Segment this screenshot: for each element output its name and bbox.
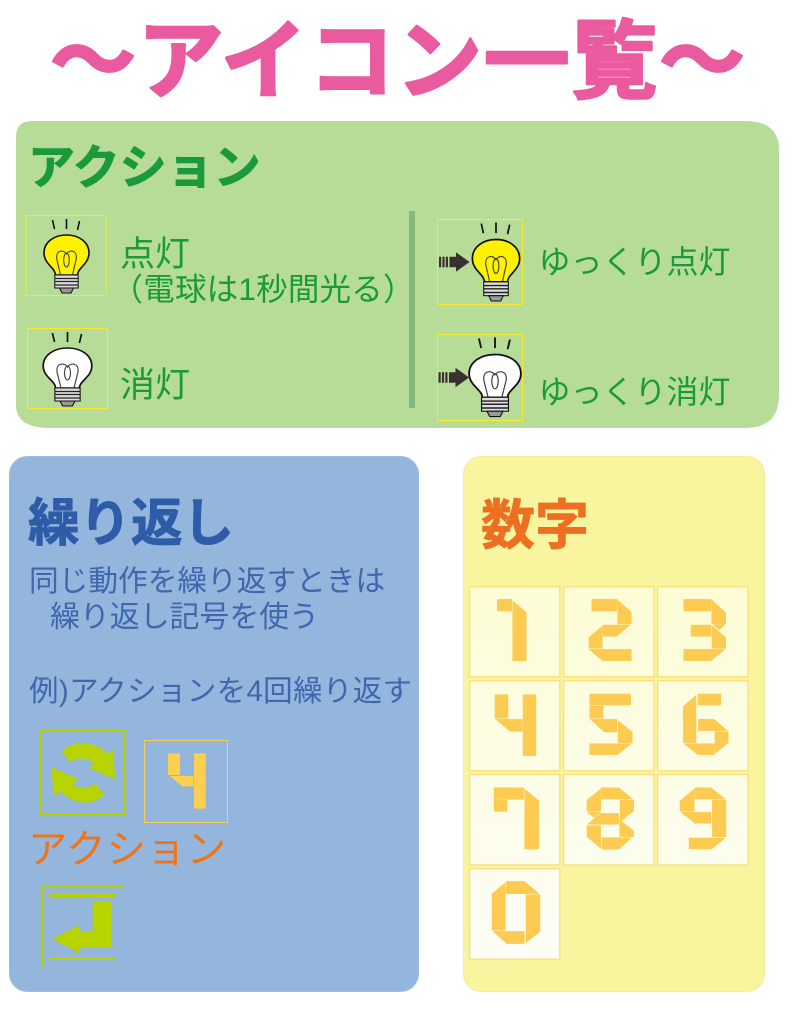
digits seven to zero: [492, 788, 726, 944]
text: repeat description: 繰り返し記号を使う: [50, 601, 319, 634]
panel: repeat: [10, 456, 418, 992]
text: repeat description: [29, 565, 412, 708]
icon: number four: [144, 740, 228, 822]
text: slow on: ゆっくり点灯: [538, 244, 731, 280]
text: repeat description: 例)アクションを4回繰り返す: [29, 675, 412, 708]
separator: [409, 211, 415, 408]
text: light on: （電球は1秒間光る）: [112, 271, 414, 307]
heading: repeat: 繰り返し: [28, 494, 234, 552]
number tiles: [470, 587, 748, 959]
icon: slow bulb on: [438, 220, 522, 304]
icon: bulb on: [26, 216, 106, 296]
text: light on: 点灯: [120, 235, 190, 274]
icon: loop start: [40, 730, 124, 814]
panel: numbers: [464, 456, 764, 992]
text: repeat description: 同じ動作を繰り返すときは: [29, 565, 385, 598]
digits one to six: [495, 599, 728, 756]
text: slow off: ゆっくり消灯: [538, 374, 731, 410]
text: action: アクション: [28, 828, 226, 872]
icon: bulb off: [28, 328, 108, 408]
panel: action: [16, 121, 779, 428]
heading: action: アクション: [28, 141, 261, 194]
text: light off: 消灯: [120, 366, 190, 405]
text: light on: [112, 235, 414, 307]
icon: slow bulb off: [438, 334, 522, 420]
icon: loop end: [42, 886, 124, 968]
title: 〜アイコン一覧〜: [50, 14, 745, 110]
heading: numbers: 数字: [481, 496, 589, 556]
